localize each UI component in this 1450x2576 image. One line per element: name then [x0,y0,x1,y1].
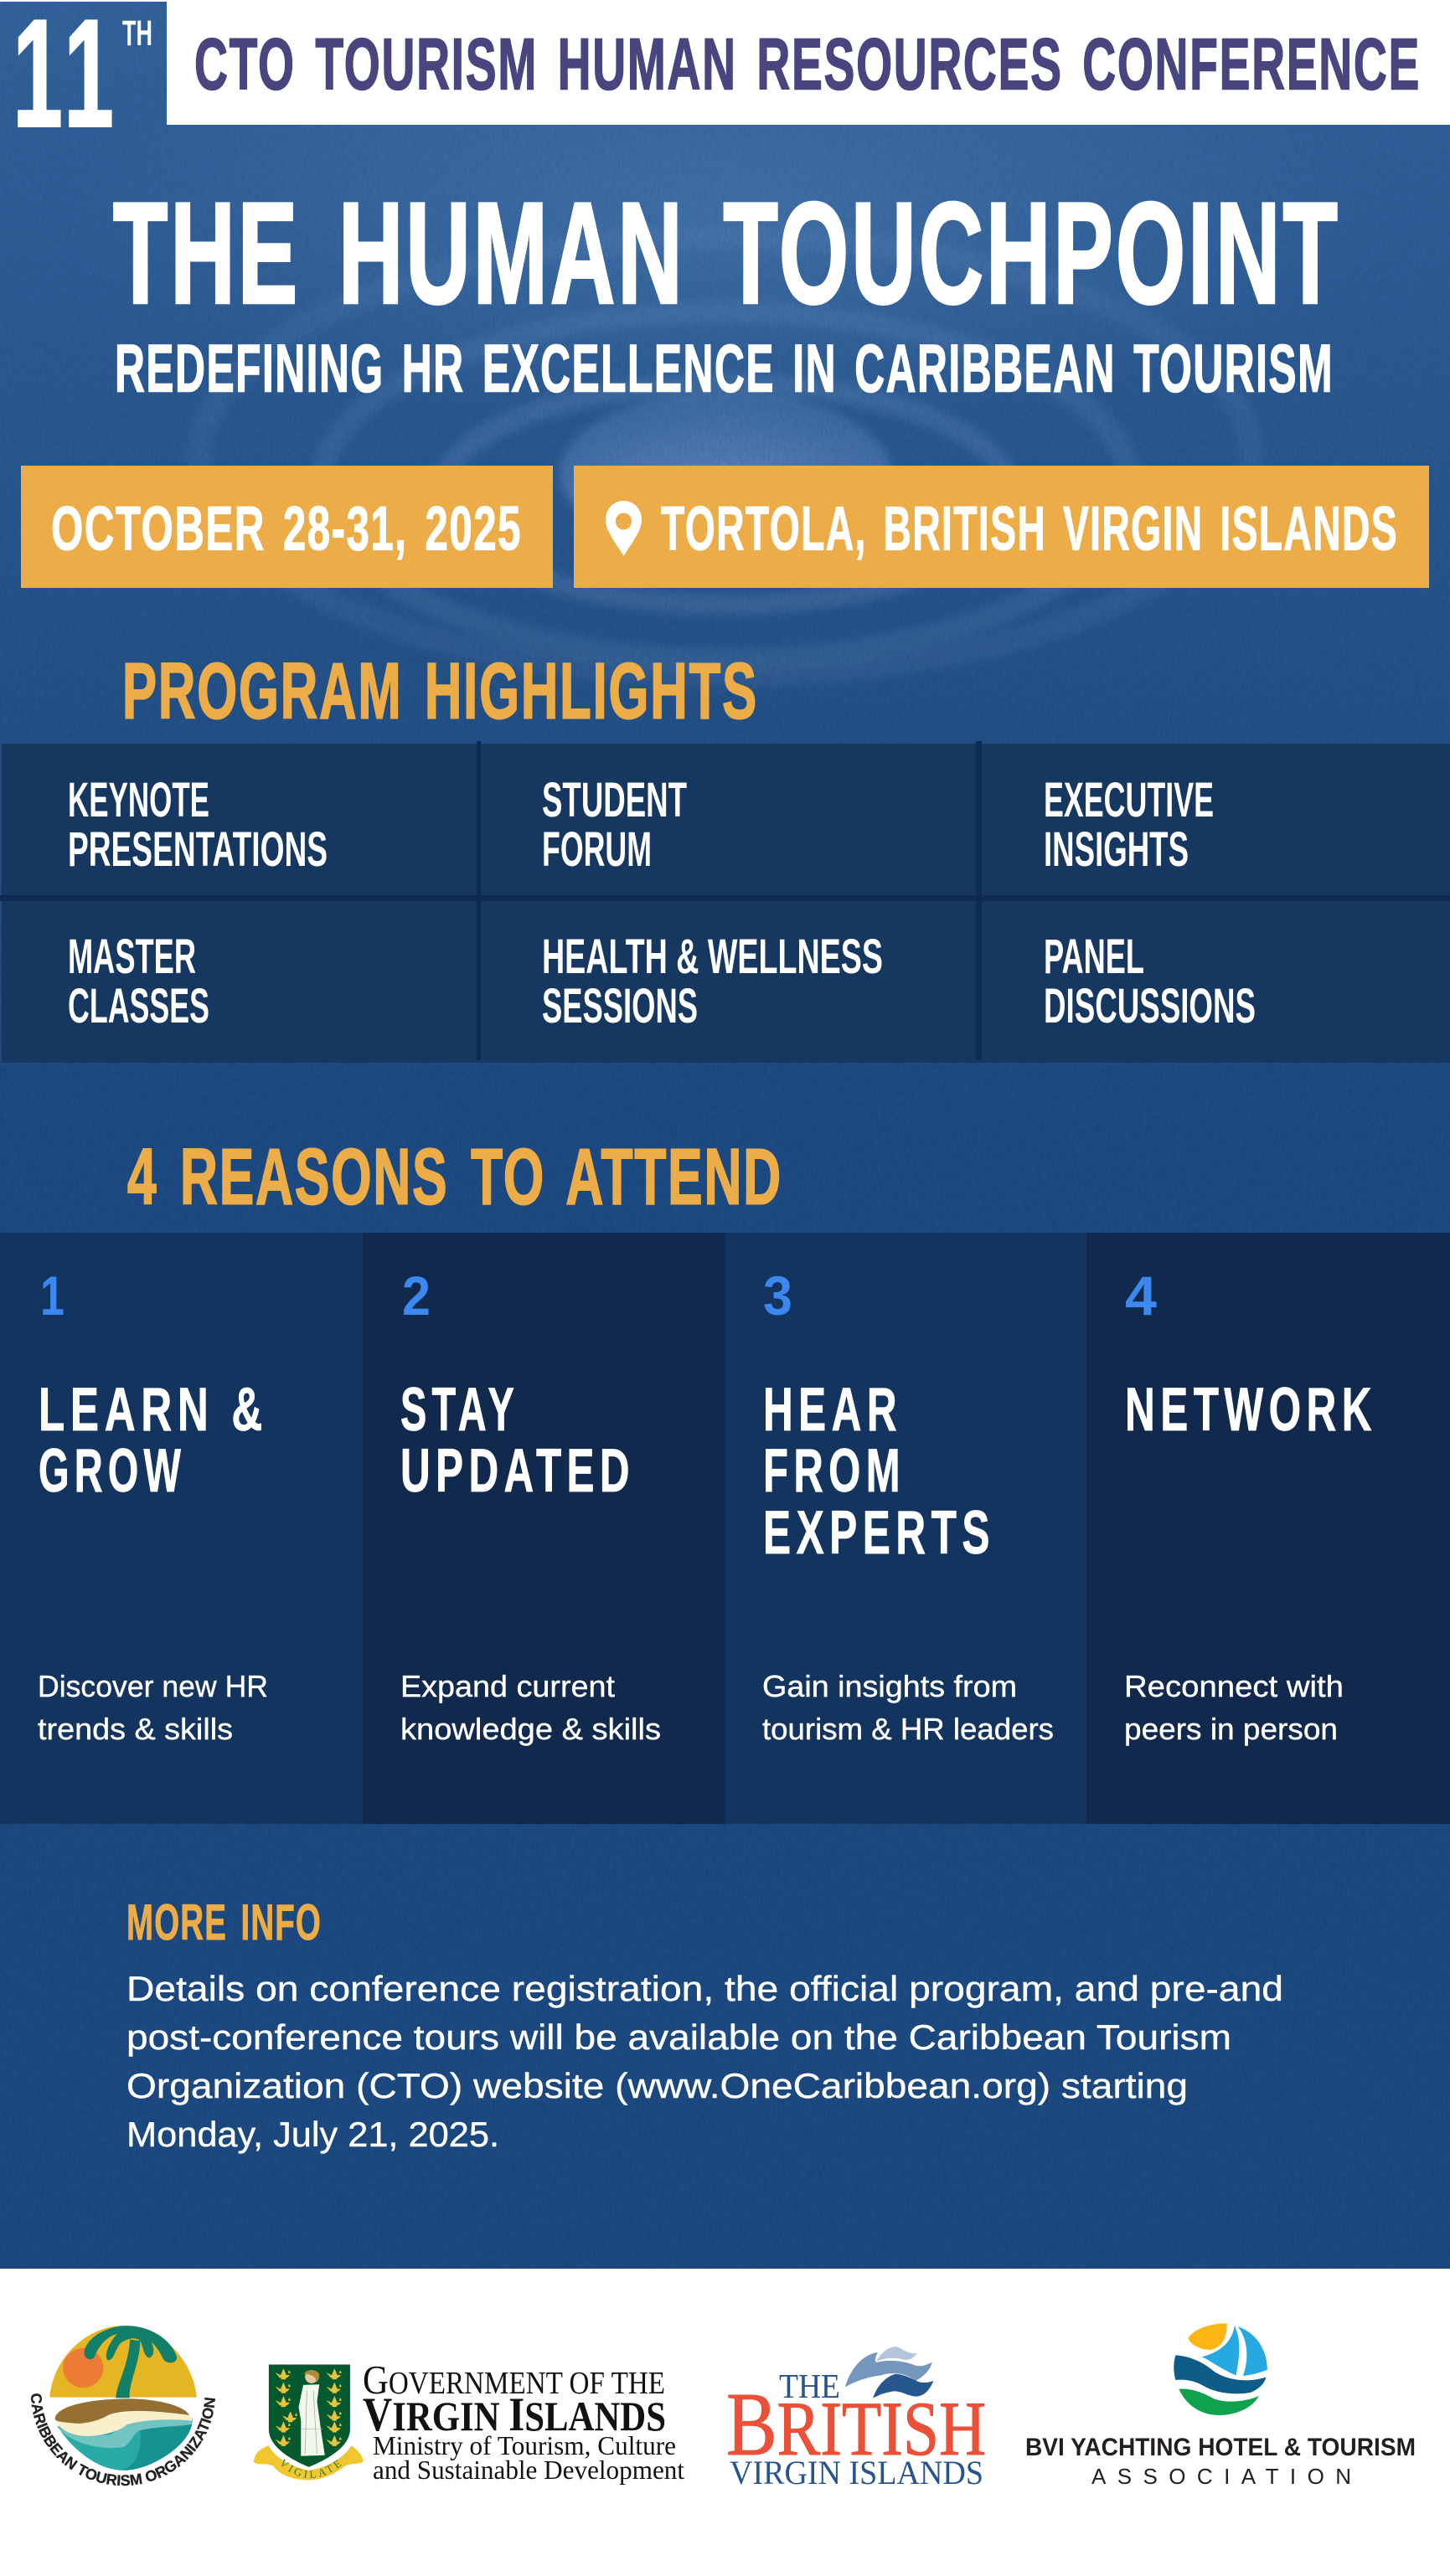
reason 1: learn and grow: Discover new HR [38,1669,268,1703]
icon: coat of arms [253,2365,364,2481]
reason 1: learn and grow: 1 [40,1265,65,1327]
date box: OCTOBER 28-31, 2025 [51,494,522,563]
government name: VIRGIN ISLANDS [363,2388,666,2441]
reason 1: learn and grow: trends & skills [38,1712,233,1746]
reason 4: network: peers in person [1124,1712,1338,1746]
item: keynote presentations [68,773,328,877]
icon: sail and sun [1174,2323,1267,2415]
icon: coat of arms: VIGILATE [281,2459,342,2479]
item: panel discussions: DISCUSSIONS [1044,979,1256,1033]
government name: Ministry of Tourism, Culture [373,2430,676,2460]
item: executive insights: EXECUTIVE [1044,773,1214,827]
wordmark: VIRGIN ISLANDS [730,2454,983,2491]
item: master classes [68,930,209,1033]
item: student forum: STUDENT [542,773,687,827]
item: master classes: CLASSES [68,979,209,1033]
reason 2: stay updated: 2 [402,1265,431,1327]
heading: 4 reasons to attend: 4 REASONS TO ATTEND [127,1132,782,1221]
reason 3: hear from experts: HEAR [763,1376,902,1444]
reason 4: network: 4 [1125,1265,1157,1327]
text block: more info details: post-conference tours will be available on the Caribbean Tourism [126,2017,1231,2057]
reason 3: hear from experts: 3 [763,1265,792,1327]
item: health and wellness sessions [542,930,883,1033]
reason 1: learn and grow [0,1233,363,1824]
icon: map pin [606,501,642,556]
wordmark: THE [779,2367,840,2405]
reason 3: hear from experts: EXPERTS [763,1499,995,1567]
reason 2: stay updated: knowledge & skills [400,1712,661,1746]
reason 2: stay updated [363,1233,725,1824]
government name [363,2357,684,2485]
item: health and wellness sessions: HEALTH & WELLNESS [542,930,883,984]
heading: more info: MORE INFO [126,1894,322,1950]
header band [0,0,1450,159]
date box [21,466,553,588]
association name [1025,2434,1416,2489]
reason 2: stay updated: STAY [400,1376,519,1444]
reason 4: network: Reconnect with [1124,1669,1344,1703]
item: student forum: FORUM [542,822,652,877]
reason 3: hear from experts: Gain insights from [762,1669,1017,1703]
association name: BVI YACHTING HOTEL & TOURISM [1025,2434,1416,2461]
reason 4: network [1086,1233,1450,1824]
item: master classes: MASTER [68,930,196,984]
item: executive insights: INSIGHTS [1044,822,1189,877]
item: health and wellness sessions: SESSIONS [542,979,698,1033]
text block: more info details: Monday, July 21, 2025. [126,2115,499,2154]
panel: sponsor logos [0,2269,1450,2491]
item: keynote presentations: PRESENTATIONS [68,822,328,877]
government name: GOVERNMENT OF THE [363,2357,665,2403]
edition number: TH [122,13,152,54]
item: executive insights [1044,773,1214,877]
location box [574,466,1429,588]
text block: more info details: Details on conference registration, the official program, and pre-and [126,1969,1283,2008]
text block: more info details: Organization (CTO) website (www.OneCaribbean.org) starting [126,2066,1188,2105]
government name: and Sustainable Development [373,2455,684,2485]
item: student forum [542,773,687,877]
logo: bvi yachting hotel and tourism association [1025,2323,1416,2489]
logo: caribbean tourism organization [30,2326,215,2486]
wordmark: BRITISH [726,2375,986,2475]
text block: more info details [126,1969,1283,2154]
logo ring text: CARIBBEAN TOURISM ORGANIZATION [30,2393,215,2486]
reason 2: stay updated: UPDATED [400,1437,635,1505]
association name: ASSOCIATION [1091,2464,1351,2489]
item: panel discussions: PANEL [1044,930,1144,984]
logo: government of the virgin islands [253,2357,684,2485]
reason 1: learn and grow: GROW [39,1437,186,1505]
item: keynote presentations: KEYNOTE [68,773,209,827]
reason 3: hear from experts [725,1233,1086,1824]
icon: sail waves [845,2347,933,2398]
item: panel discussions [1044,930,1256,1033]
heading: program highlights: PROGRAM HIGHLIGHTS [122,647,758,735]
reason 3: hear from experts: FROM [763,1437,906,1505]
panel: program highlights grid [0,741,1450,1063]
reason 1: learn and grow: LEARN & [39,1376,268,1444]
reason 3: hear from experts: tourism & HR leaders [762,1712,1054,1746]
logo: the british virgin islands [726,2347,986,2491]
panel: reasons [0,1233,1450,1824]
reason 2: stay updated: Expand current [400,1669,615,1703]
